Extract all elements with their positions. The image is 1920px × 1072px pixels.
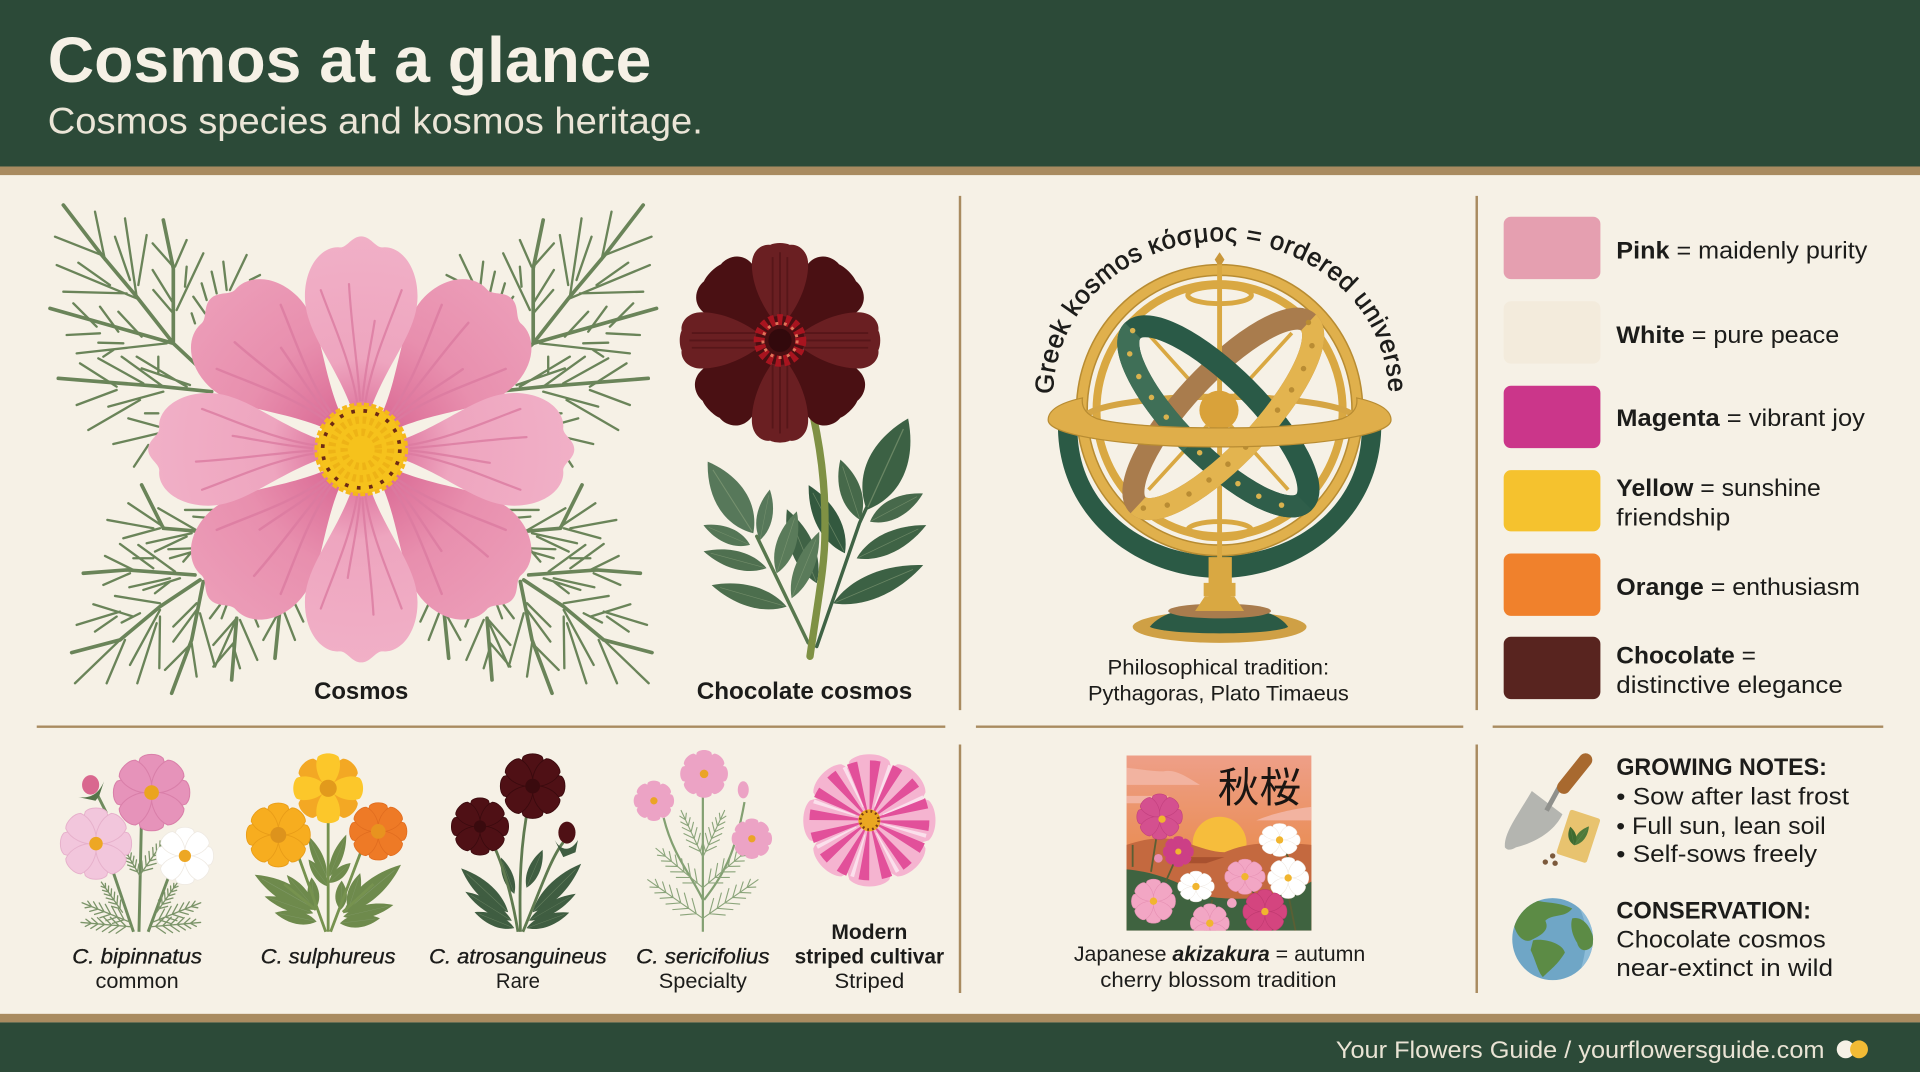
flower stems [1133,833,1296,931]
icon: footer toggle [1837,1040,1868,1058]
illustration: armillary sphere [1048,252,1391,643]
picture: akizakura autumn scene [1126,756,1312,931]
japanese characters: 秋桜 [1218,764,1301,811]
leaf stems [757,507,867,647]
swatch: yellow: Yellow = sunshine [1616,475,1821,502]
species: C. sericifolius [625,740,780,932]
caption: philosophical tradition: Pythagoras, Plato Timaeus [1088,681,1349,705]
illustration: chocolate cosmos [680,243,931,656]
outer meridian rings [1082,270,1357,550]
icon: globe [1512,898,1594,980]
brown tilted band [1109,296,1337,532]
swatch: yellow: friendship [1616,504,1730,531]
arched heading: Greek kosmos: Greek kosmos κόσμος = ordered universe [1035,227,1402,393]
hills [1127,838,1311,931]
axis finial [1215,252,1224,264]
swatch: chocolate: distinctive elegance [1616,672,1843,699]
species: C. bipinnatus [46,739,225,935]
label: C. bipinnatus: C. bipinnatus [72,945,202,969]
sky [1127,755,1311,931]
species: C. sulphureus [233,739,419,932]
label: C. bipinnatus: common [96,969,179,993]
green cradle [1058,430,1381,578]
label: Cosmos: Cosmos [314,678,408,705]
centre sphere [1199,391,1239,430]
panel dividers [37,196,1883,993]
struts [1147,333,1292,490]
species: C. atrosanguineus [439,740,587,934]
swatch: orange: Orange = enthusiasm [1616,574,1860,601]
green tilted band front [1105,331,1304,530]
conservation text: near-extinct in wild [1616,955,1833,982]
front of horizontal ring [1048,398,1391,447]
leaves [695,411,931,616]
base [1133,596,1307,643]
pedestal [1195,557,1244,612]
label: striped cultivar [795,920,944,993]
label: striped cultivar: Striped [834,969,904,993]
caption: philosophical tradition [1088,656,1349,705]
footer credit: Your Flowers Guide / yourflowersguide.com [1336,1037,1824,1064]
label: C. bipinnatus [72,945,202,993]
conservation text: Chocolate cosmos [1616,927,1826,954]
title: Cosmos at a glance [48,25,651,96]
sun [1192,816,1246,852]
icon: trowel and seed packet [1505,760,1601,866]
swatch: white [1504,301,1839,364]
label: C. sericifolius: C. sericifolius [636,945,770,969]
flowers [1131,794,1309,931]
species: modern striped cultivar [776,727,963,914]
swatch: magenta: Magenta = vibrant joy [1616,405,1866,432]
dark petals [680,243,880,443]
label: C. atrosanguineus: Rare [496,969,540,993]
label: Chocolate cosmos: Chocolate cosmos [697,678,912,705]
growing notes text: • Sow after last frost [1616,783,1849,810]
label: striped cultivar: striped cultivar [795,945,944,969]
petals [148,236,574,662]
header band [0,0,1920,175]
conservation text [1616,897,1833,982]
footer band [0,1014,1920,1072]
caption: akizakura: cherry blossom tradition [1100,968,1337,992]
label: C. sericifolius: Specialty [659,969,747,993]
main stem [810,416,825,656]
back of horizontal ring [1082,397,1357,443]
swatch: magenta [1504,386,1866,448]
swatch: pink: Pink = maidenly purity [1616,237,1868,264]
swatch: pink [1504,217,1868,279]
illustration: large pink cosmos with foliage [50,205,657,693]
label: C. sulphureus: C. sulphureus [261,945,396,969]
meadow [1127,869,1311,931]
label: C. atrosanguineus: C. atrosanguineus [429,945,607,969]
caption: philosophical tradition: Philosophical tradition: [1108,656,1329,680]
caption: akizakura [1074,942,1365,992]
foliage [50,205,657,693]
green tilted band back [1105,303,1332,530]
growing notes text: GROWING NOTES: [1616,754,1827,781]
caption: akizakura: Japanese akizakura = autumn [1074,942,1365,966]
colour meaning legend [1504,217,1868,699]
gold tilted band [1138,323,1337,532]
swatch: white: White = pure peace [1616,322,1839,349]
conservation text: CONSERVATION: [1616,897,1811,924]
growing notes text: • Self-sows freely [1616,841,1818,868]
label: striped cultivar: Modern [831,920,907,944]
swatch: yellow [1504,470,1821,531]
label: C. atrosanguineus [429,945,607,993]
growing notes text [1616,754,1849,868]
swatch: orange [1504,553,1860,616]
label: C. sericifolius [636,945,770,993]
swatch: chocolate [1504,637,1843,699]
subtitle: Cosmos species and kosmos heritage. [48,100,703,141]
growing notes text: • Full sun, lean soil [1616,813,1826,840]
swatch: chocolate: Chocolate = [1616,643,1756,670]
clouds [1127,768,1311,820]
vertical axis [1218,260,1222,561]
flower centre [317,405,406,494]
